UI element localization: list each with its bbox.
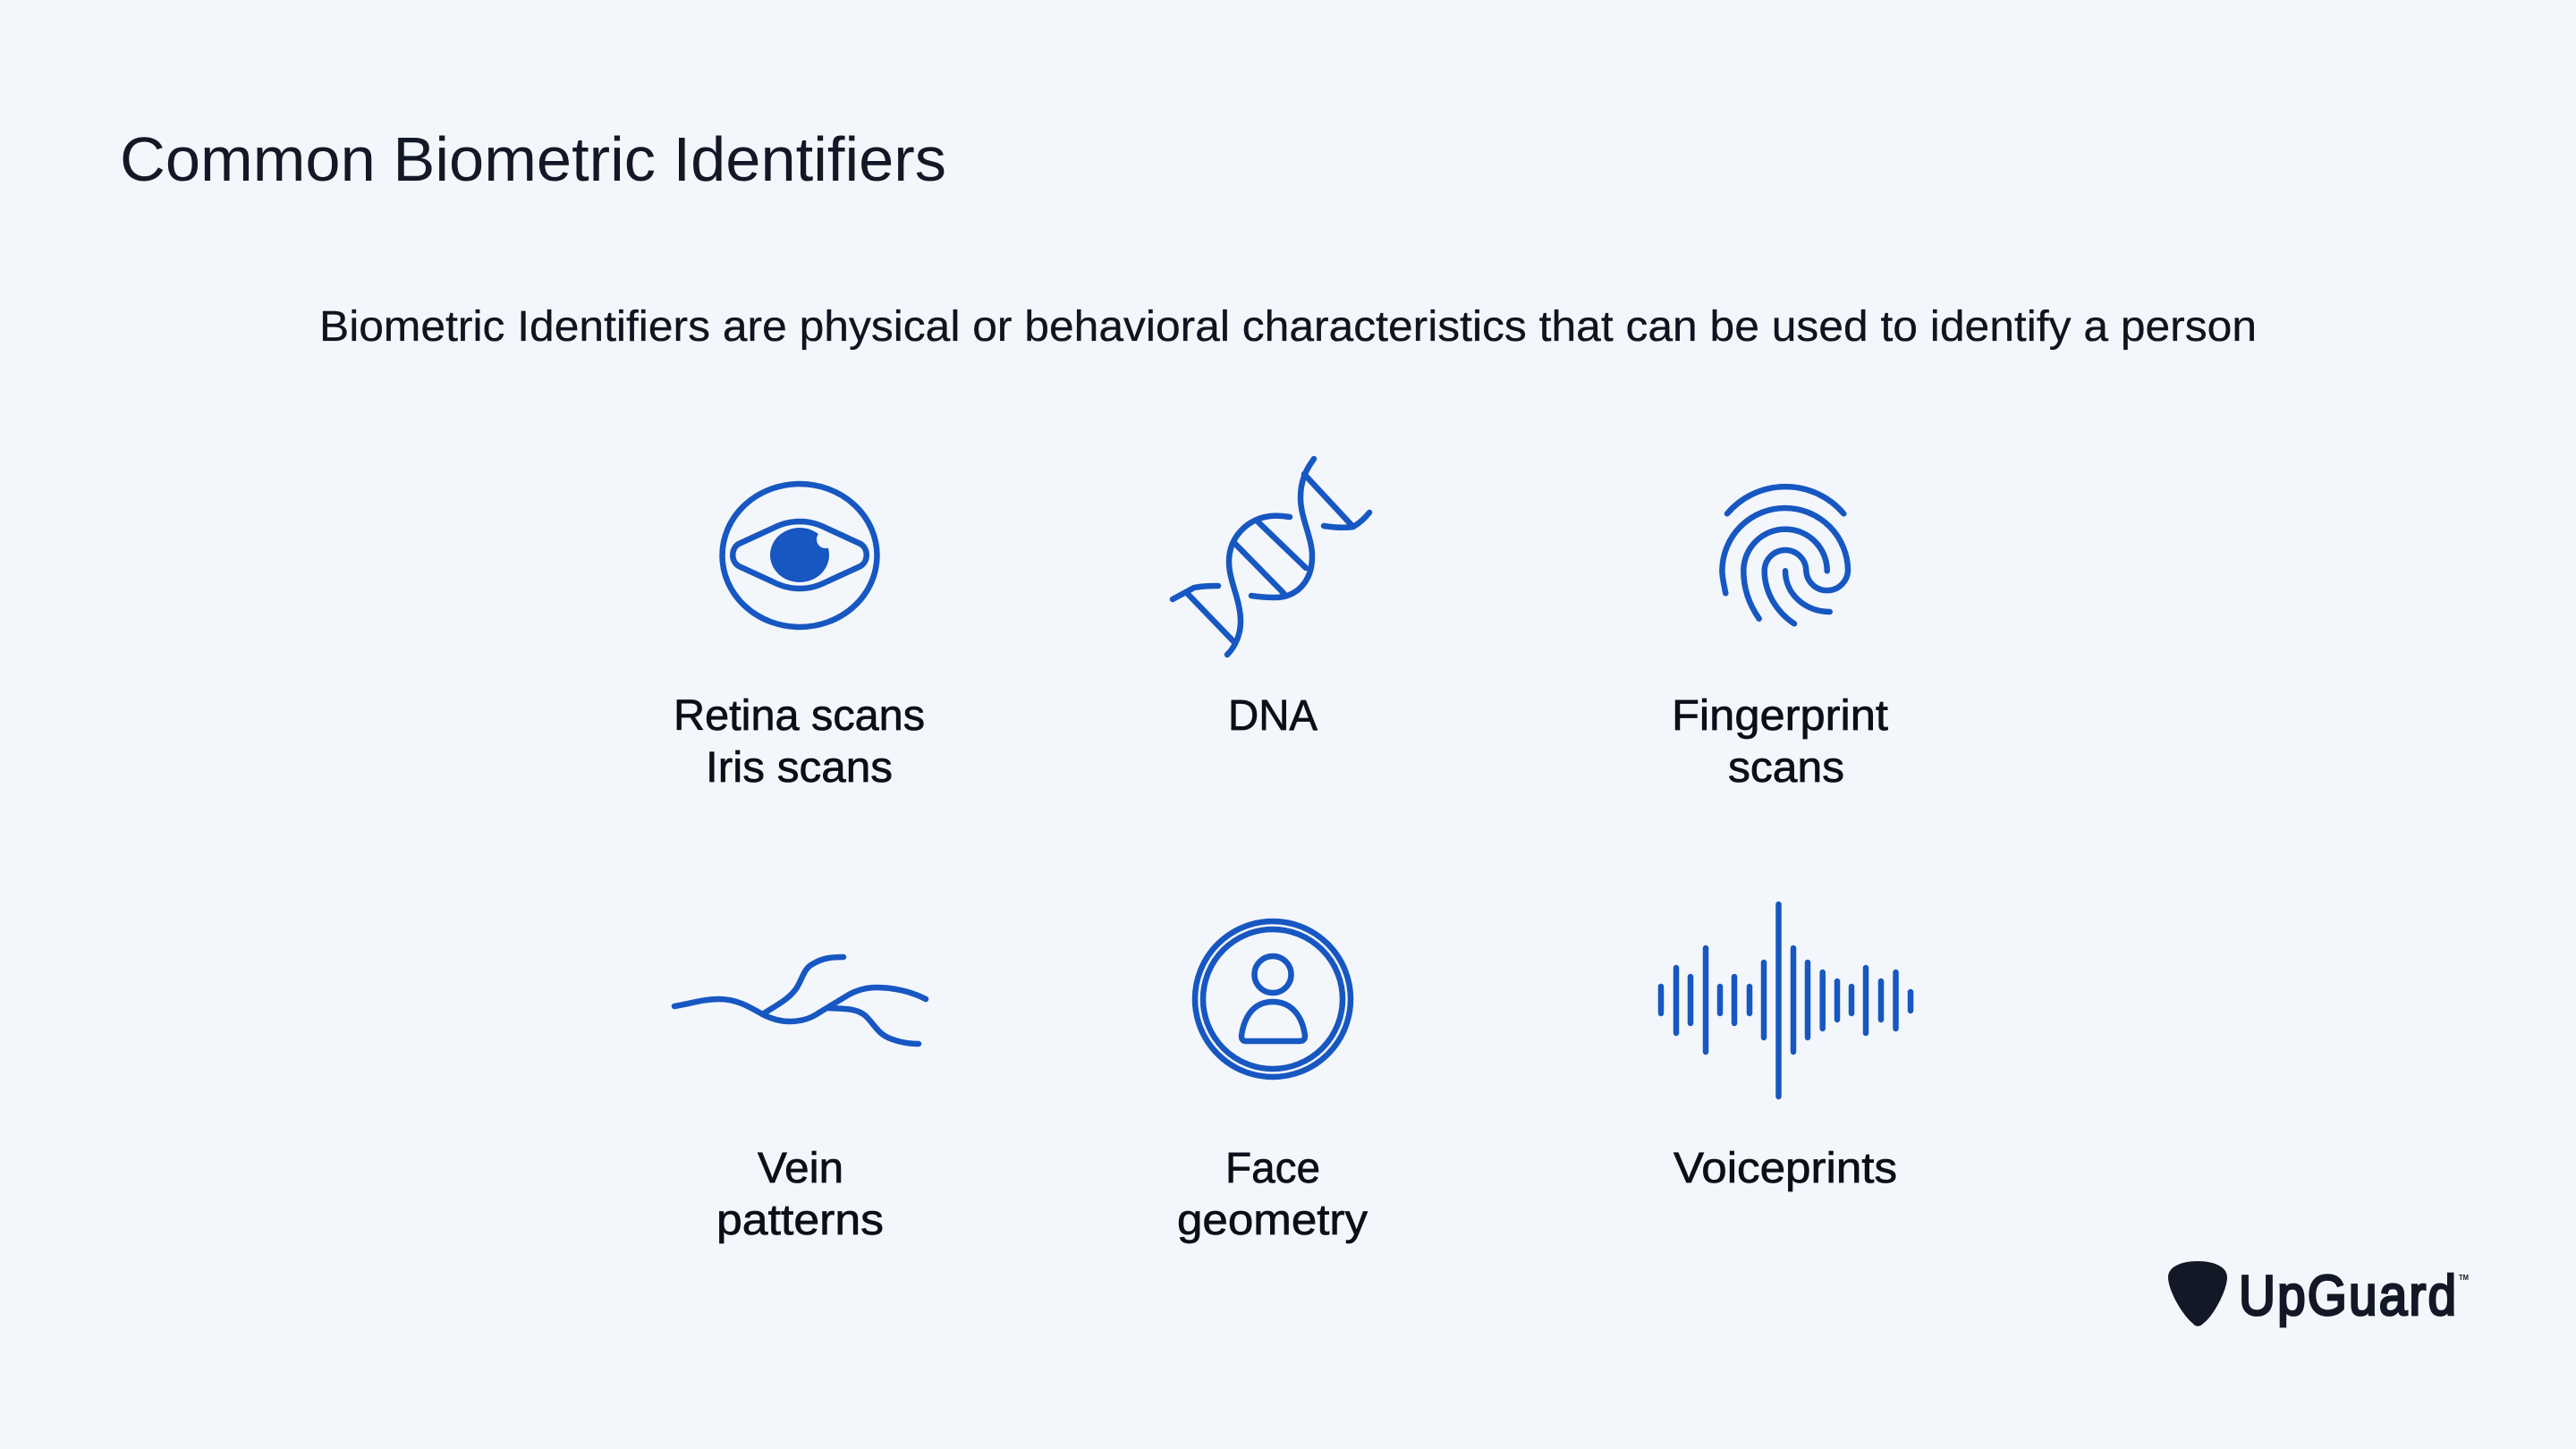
label: vein patterns: Vein: [758, 1145, 843, 1192]
label: voiceprints: Voiceprints: [1674, 1145, 1897, 1192]
label: face geometry: Face: [1225, 1145, 1320, 1192]
label: DNA: DNA: [1228, 692, 1318, 740]
label: retina and iris scans: Retina scans: [674, 692, 925, 740]
logo: UpGuard: TM: [2459, 1274, 2469, 1282]
logo: UpGuard: [2168, 1261, 2469, 1327]
logo: UpGuard: UpGuard: [2239, 1264, 2456, 1327]
label: face geometry: [1177, 1145, 1368, 1244]
label: face geometry: geometry: [1177, 1197, 1368, 1244]
label: retina and iris scans: Iris scans: [706, 744, 893, 792]
icon: fingerprint: [1722, 487, 1848, 623]
icon: eye: [723, 484, 877, 627]
label: fingerprint scans: Fingerprint: [1672, 692, 1888, 740]
subtitle: Biometric Identifiers are physical or behavioral characteristics that can be used to identify a person: [319, 303, 2257, 351]
label: fingerprint scans: [1672, 692, 1888, 792]
label: retina and iris scans: [674, 692, 925, 792]
title: Common Biometric Identifiers: [120, 124, 946, 194]
label: vein patterns: [716, 1145, 884, 1244]
icon: vein patterns: [674, 957, 926, 1044]
label: vein patterns: patterns: [716, 1197, 884, 1244]
icon: face geometry: [1195, 921, 1351, 1077]
label: fingerprint scans: scans: [1728, 744, 1844, 792]
icon: DNA: [1173, 459, 1369, 655]
icon: voiceprint waveform: [1661, 904, 1911, 1097]
